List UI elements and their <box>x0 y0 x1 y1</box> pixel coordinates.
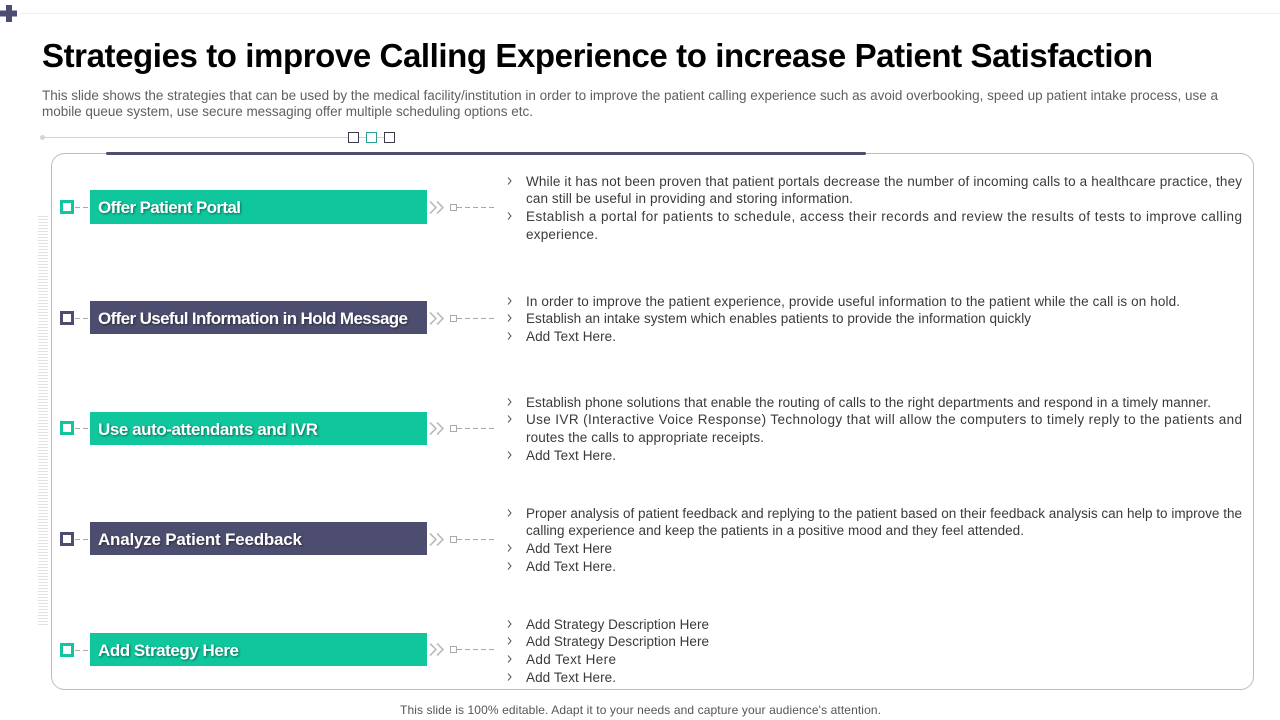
row 3: Use auto-attendants and IVR: Establish phone solutions that enable the routing of calls to the right departments and respond in a timely manner. <box>526 395 1211 410</box>
icon: plus <box>0 5 17 22</box>
row 4: Analyze Patient Feedback: Add Text Here <box>526 541 612 556</box>
row 5: Add Strategy Here: Add Strategy Description Here <box>526 617 709 632</box>
row 1: Offer Patient Portal: While it has not been proven that patient portals decrease the number of incoming calls to a healthcare practice, they <box>526 174 1242 189</box>
row 4: Analyze Patient Feedback: Analyze Patient Feedback <box>98 530 303 549</box>
subtitle text <box>42 88 1218 119</box>
row 1: Offer Patient Portal <box>60 174 1242 242</box>
row 4: Analyze Patient Feedback <box>60 506 1242 574</box>
row 4: Analyze Patient Feedback: Add Text Here. <box>526 559 616 574</box>
row 5: Add Strategy Here: Add Text Here. <box>526 670 616 685</box>
divider with three squares <box>40 132 394 142</box>
row 3: Use auto-attendants and IVR <box>60 395 1242 463</box>
row 2: Offer Useful Information in Hold Message: Add Text Here. <box>526 329 616 344</box>
row 5: Add Strategy Here: Add Strategy Here <box>98 641 239 660</box>
row 2: Offer Useful Information in Hold Message <box>60 294 1180 344</box>
title: Strategies to improve Calling Experience to increase Patient Satisfaction <box>42 37 1153 74</box>
side stripes <box>38 216 48 627</box>
row 5: Add Strategy Here: Add Strategy Description Here <box>526 634 709 649</box>
subtitle text: mobile queue system, use secure messaging offer multiple scheduling options etc. <box>42 104 533 119</box>
row 3: Use auto-attendants and IVR: Use IVR (Interactive Voice Response) Technology that will allow the computers to timely reply to the patients and <box>526 412 1242 427</box>
footer note: This slide is 100% editable. Adapt it to your needs and capture your audience's attention. <box>400 703 881 717</box>
row 5: Add Strategy Here <box>60 617 709 685</box>
row 4: Analyze Patient Feedback: calling experience and keep the patients in a positive mood and they feel attended. <box>526 523 1024 538</box>
row 1: Offer Patient Portal: Offer Patient Portal <box>98 198 241 217</box>
row 2: Offer Useful Information in Hold Message: In order to improve the patient experience, provide useful information to the patient while the call is on hold. <box>526 294 1180 309</box>
panel: strategies frame <box>52 152 1254 690</box>
row 2: Offer Useful Information in Hold Message: Offer Useful Information in Hold Message <box>98 309 408 328</box>
row 3: Use auto-attendants and IVR: Add Text Here. <box>526 448 616 463</box>
subtitle text: This slide shows the strategies that can be used by the medical facility/institution in order to improve the patient calling experience such as avoid overbooking, speed up patient intake process, use a <box>42 88 1218 103</box>
row 1: Offer Patient Portal: Establish a portal for patients to schedule, access their records and review the results of tests to improve calling <box>526 209 1242 224</box>
row 2: Offer Useful Information in Hold Message: Establish an intake system which enables patients to provide the information quickly <box>526 311 1031 326</box>
row 1: Offer Patient Portal: can still be useful in providing and storing information. <box>526 191 853 206</box>
row 4: Analyze Patient Feedback: Proper analysis of patient feedback and replying to the patient based on their feedback analysis can help to improve the <box>526 506 1242 521</box>
row 3: Use auto-attendants and IVR: Use auto-attendants and IVR <box>98 420 318 439</box>
row 5: Add Strategy Here: Add Text Here <box>526 652 616 667</box>
row 3: Use auto-attendants and IVR: routes the calls to appropriate receipts. <box>526 430 764 445</box>
row 1: Offer Patient Portal: experience. <box>526 227 598 242</box>
